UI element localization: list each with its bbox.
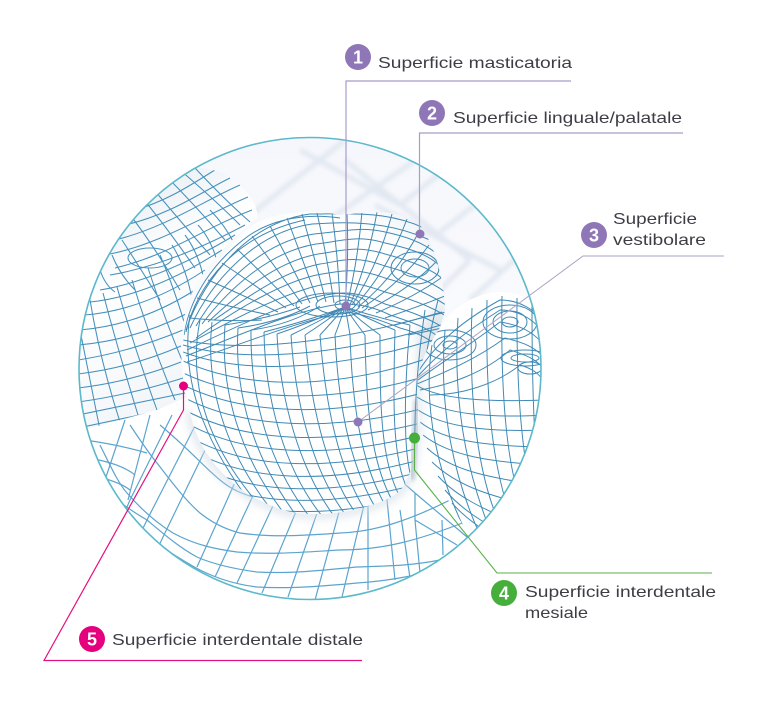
- infographic: tooth surfaces: [43, 44, 724, 662]
- callout 1: masticatory surface: 1: [353, 48, 363, 68]
- callout 4: mesial interdental surface: [409, 432, 716, 622]
- callout 3: vestibular surface: 3: [589, 226, 599, 246]
- illustration circle: [60, 137, 550, 600]
- left tooth: [80, 168, 257, 428]
- callout 2: lingual/palatal surface: 2: [427, 104, 437, 124]
- callout 3: vestibular surface: Superficie: [613, 211, 697, 228]
- crown body longitudinal lines: [188, 300, 438, 516]
- main molar: [183, 212, 445, 514]
- callout 5: distal interdental surface: [44, 382, 363, 660]
- callout 3: vestibular surface: vestibolare: [613, 232, 706, 249]
- callout 4: mesial interdental surface: 4: [499, 584, 509, 604]
- circle outline: [79, 138, 541, 600]
- callout 5: distal interdental surface: 5: [87, 630, 97, 650]
- callout 4: mesial interdental surface: mesiale: [525, 605, 588, 622]
- shadow under teeth: [190, 410, 417, 514]
- gap shadow between molar and right tooth: [412, 400, 417, 480]
- callout 1: masticatory surface: [342, 44, 572, 310]
- callout 3: vestibular surface: [354, 211, 724, 426]
- callout 4: mesial interdental surface: Superficie interdentale: [525, 584, 716, 601]
- occlusal surface mesh: [184, 212, 446, 362]
- callout 1: masticatory surface: Superficie masticatoria: [378, 55, 572, 72]
- callout 2: lingual/palatal surface: Superficie linguale/palatale: [453, 110, 682, 127]
- callout 5: distal interdental surface: Superficie interdentale distale: [112, 632, 363, 649]
- crown body latitude lines: [183, 312, 442, 512]
- gum mesh: [85, 415, 470, 600]
- right tooth: [416, 295, 540, 528]
- background with blurred tile lattice: [199, 138, 516, 301]
- callout 2: lingual/palatal surface: [416, 100, 683, 238]
